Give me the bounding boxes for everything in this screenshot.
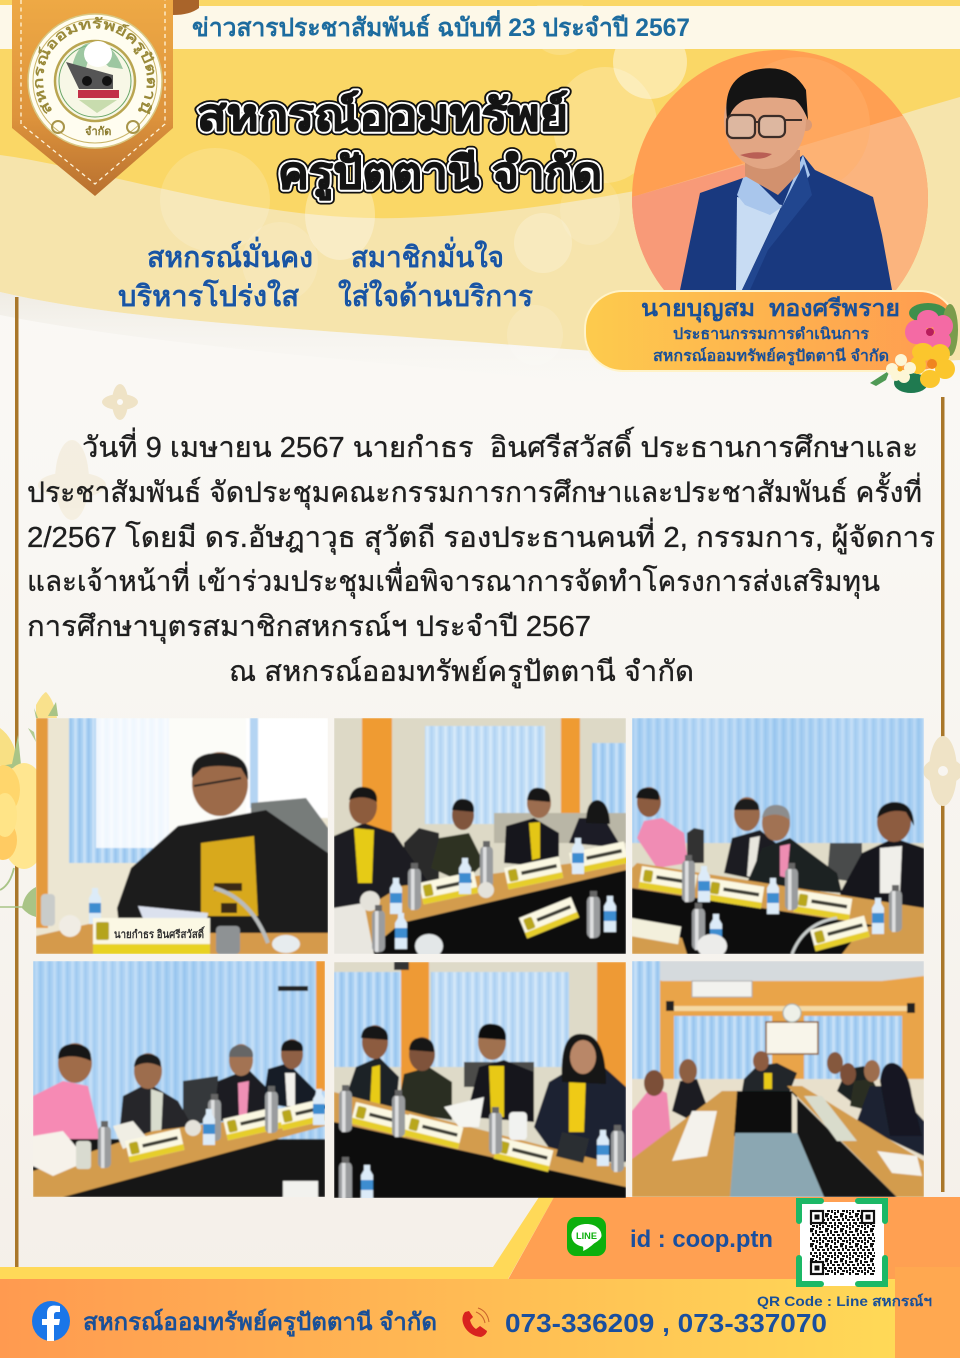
logo seal: สหกรณ์ออมทรัพย์ครูปัตตานี xyxy=(34,16,156,114)
phone numbers: 073-336209 , 073-337070 xyxy=(505,1308,827,1338)
header background waves xyxy=(0,0,960,396)
name pill: นายบุญสม ทองศรีพราย xyxy=(641,295,900,323)
body text: การศึกษาบุตรสมาชิกสหกรณ์ฯ ประจำปี 2567 xyxy=(27,611,591,644)
body text: 2/2567 โดยมี ดร.อัษฎาวุธ สุวัตถี รองประธานคนที่ 2, กรรมการ, ผู้จัดการ xyxy=(27,518,935,555)
main title: ครูปัตตานี จำกัด xyxy=(278,149,602,200)
footer shapes xyxy=(0,1197,960,1358)
slogan: ใส่ใจด้านบริการ xyxy=(338,279,533,313)
name pill: สหกรณ์ออมทรัพย์ครูปัตตานี จำกัด xyxy=(653,347,889,367)
logo seal: จำกัด xyxy=(85,125,111,138)
facebook name: สหกรณ์ออมทรัพย์ครูปัตตานี จำกัด xyxy=(83,1308,437,1337)
photo 4: left table row xyxy=(33,961,338,1201)
icon: phone xyxy=(462,1308,489,1337)
photo 1: speaker close-up: นายกำธร อินศรีสวัสดิ์ xyxy=(114,926,205,941)
jacket xyxy=(680,155,892,290)
body text: ประชาสัมพันธ์ จัดประชุมคณะกรรมการการศึกษาและประชาสัมพันธ์ ครั้งที่ xyxy=(27,472,922,510)
qr code xyxy=(799,1201,885,1286)
photo 3: pink shirt and elders xyxy=(629,718,924,958)
line id: id : coop.ptn xyxy=(630,1226,773,1253)
photo 2: four members at table xyxy=(334,718,628,958)
name pill xyxy=(585,291,957,371)
bokeh circles xyxy=(160,0,687,365)
portrait of chairman xyxy=(632,50,928,290)
body text: ณ สหกรณ์ออมทรัพย์ครูปัตตานี จำกัด xyxy=(229,656,694,689)
photo 1: speaker close-up xyxy=(36,718,328,954)
qr caption: QR Code : Line สหกรณ์ฯ xyxy=(757,1293,932,1309)
ornament: yellow flower left xyxy=(0,692,58,917)
icon: line xyxy=(567,1217,606,1256)
slogan: บริหารโปร่งใส xyxy=(118,278,299,313)
photo 6: wide room view xyxy=(632,961,924,1197)
top header strip xyxy=(0,0,960,49)
shirt xyxy=(736,197,782,290)
body text xyxy=(27,426,935,689)
side border lines xyxy=(15,297,944,1267)
slogan: สมาชิกมั่นใจ xyxy=(351,236,504,274)
icon: line: LINE xyxy=(576,1231,597,1241)
main title: สหกรณ์ออมทรัพย์ xyxy=(197,90,568,140)
ribbon with logo xyxy=(12,0,199,196)
slogan: สหกรณ์มั่นคง xyxy=(147,236,313,274)
slogan xyxy=(118,236,533,313)
neck and face xyxy=(745,150,800,195)
main title: ครูปัตตานี จำกัด xyxy=(278,149,602,200)
main title xyxy=(197,90,602,200)
body text: วันที่ 9 เมษายน 2567 นายกำธร อินศรีสวัสดิ์ ประธานการศึกษาและ xyxy=(82,426,918,464)
main title: สหกรณ์ออมทรัพย์ xyxy=(197,90,568,140)
newsletter heading: ข่าวสารประชาสัมพันธ์ ฉบับที่ 23 ประจำปี 2567 xyxy=(192,10,690,42)
photo 5: four members xyxy=(334,962,626,1204)
main title: สหกรณ์ออมทรัพย์ xyxy=(197,90,568,140)
name pill: ประธานกรรมการดำเนินการ xyxy=(673,325,870,343)
icon: tropical flowers xyxy=(870,303,958,393)
main title: ครูปัตตานี จำกัด xyxy=(278,149,602,200)
body text: และเจ้าหน้าที่ เข้าร่วมประชุมเพื่อพิจารณาการจัดทำโครงการส่งเสริมทุน xyxy=(27,562,880,599)
icon: facebook xyxy=(32,1301,70,1341)
ornament: faint thai motifs xyxy=(38,384,960,806)
